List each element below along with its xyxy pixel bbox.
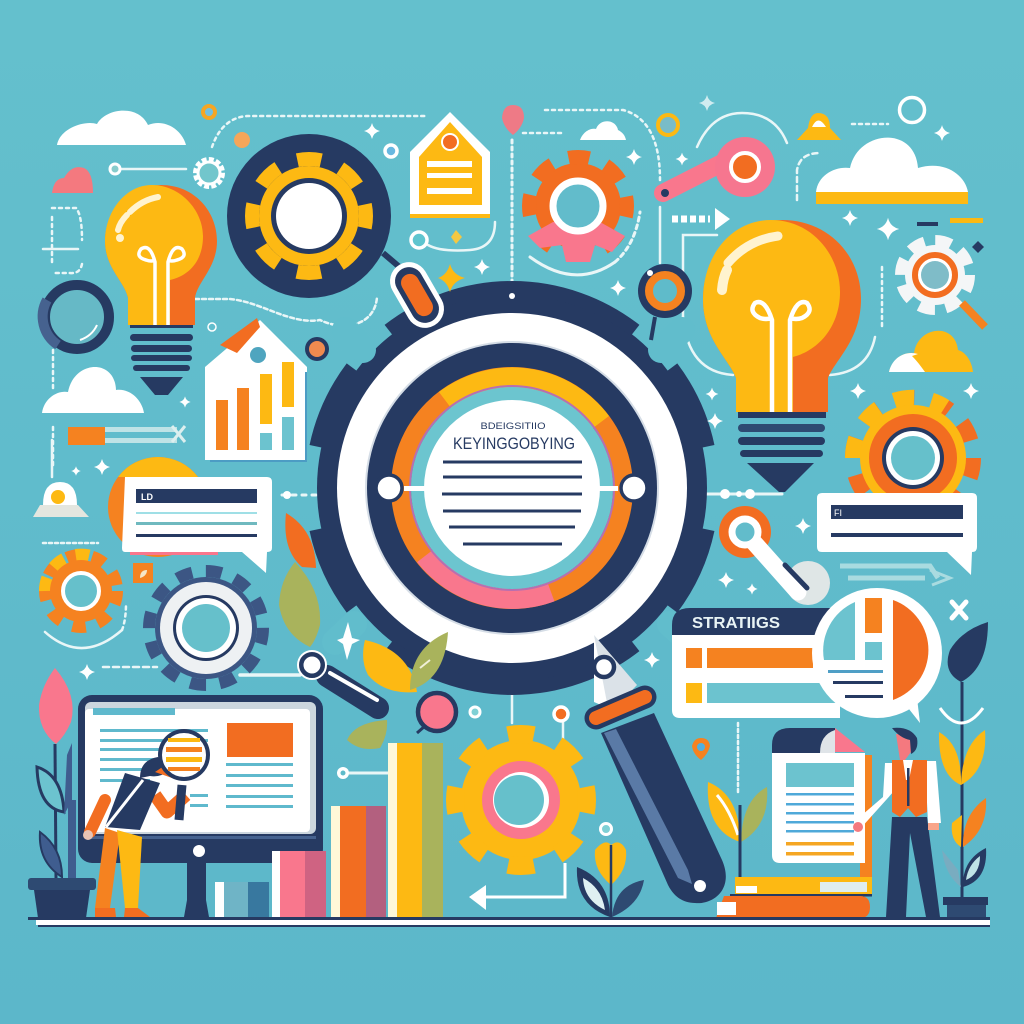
speech bubble: left: LD bbox=[141, 492, 153, 502]
small bars: top right bbox=[917, 218, 983, 226]
cloud: right yellow bbox=[889, 331, 973, 372]
chart: house with bars bbox=[205, 318, 307, 462]
gear: bottom centre yellow bbox=[455, 734, 587, 897]
cloud: top right yellow bbox=[816, 138, 968, 204]
cloud: top small bbox=[580, 121, 626, 140]
icon: small ring above plant bbox=[600, 824, 612, 834]
person: with magnifier at monitor bbox=[83, 731, 208, 917]
person: right bbox=[853, 728, 941, 917]
light bulb: right bbox=[703, 220, 861, 492]
connector node to bars bbox=[337, 767, 349, 779]
hand magnifier bbox=[160, 731, 208, 820]
icon: orange hexagon bbox=[234, 132, 250, 148]
lens heading bbox=[453, 421, 575, 453]
arrow: dashed right bbox=[672, 208, 730, 230]
icon: white ring top right bbox=[900, 98, 924, 122]
icon: navy sparkle bbox=[972, 241, 984, 253]
leaves: centre bbox=[347, 632, 448, 749]
sparkles bbox=[71, 95, 979, 680]
icon: yellow ring top right bbox=[658, 115, 678, 135]
screen heading bar bbox=[93, 708, 175, 715]
gear: top left in navy disc bbox=[227, 134, 403, 298]
ring icon: left bbox=[43, 285, 109, 349]
icon: bell dome bbox=[33, 482, 89, 517]
icon: small ring bbox=[208, 323, 216, 331]
icon: teal ring bbox=[385, 145, 397, 157]
main gear lens bbox=[316, 288, 708, 688]
gear: left small orange bbox=[45, 555, 117, 627]
icon: wrench with orange disc bbox=[719, 506, 830, 605]
cloud: top left bbox=[57, 111, 186, 145]
icon: star yellow bbox=[438, 264, 465, 292]
icon: small orange target bbox=[305, 337, 329, 361]
ground line bbox=[28, 917, 990, 927]
lens text lines bbox=[442, 462, 582, 544]
panel: strategies bbox=[672, 588, 942, 723]
books bbox=[716, 877, 872, 918]
icon: pink wrench bbox=[661, 137, 775, 197]
gear: top centre orange bbox=[528, 157, 627, 262]
speech bubble: right bbox=[817, 493, 977, 575]
lens heading: KEYINGGOBYING bbox=[453, 434, 575, 453]
gear notches bbox=[335, 330, 690, 642]
gear: navy with white ring bbox=[149, 571, 263, 685]
ring nodes bbox=[376, 475, 647, 501]
icon: small orange square bbox=[133, 563, 153, 583]
leaves: orange and olive bbox=[279, 513, 320, 647]
connector lines bbox=[43, 110, 888, 793]
light bulb: left bbox=[105, 185, 217, 395]
cloud: left middle bbox=[42, 367, 144, 413]
screen image block bbox=[227, 723, 293, 757]
plant: left bbox=[28, 668, 96, 918]
document stack bbox=[772, 728, 872, 877]
target node: top right of lens bbox=[638, 264, 692, 340]
magnifier handle: orange capsule bbox=[383, 255, 451, 335]
icon: node ring bbox=[411, 232, 427, 248]
gear: right small with magnifier bbox=[901, 241, 985, 327]
plant: small centre bbox=[577, 842, 644, 917]
gear: right large orange bbox=[853, 398, 973, 518]
gear teeth bbox=[316, 288, 708, 688]
icon: white sparkle burst bbox=[337, 622, 360, 660]
arrow: faded double bbox=[840, 566, 950, 585]
icon: small white gear bbox=[195, 159, 223, 187]
small bar: orange with tip bbox=[68, 426, 185, 445]
icon: yellow dome bbox=[797, 113, 841, 140]
icon: ring above gear bbox=[554, 707, 568, 721]
icon: pink balloon pin bbox=[417, 693, 456, 733]
icon: tag document bbox=[410, 112, 490, 218]
small magnifier: navy capsule bbox=[298, 651, 378, 708]
plant: yellow and olive leaves bbox=[708, 782, 767, 878]
plant: right bbox=[939, 622, 988, 918]
connector nodes bbox=[283, 293, 755, 499]
colour ring bbox=[401, 377, 623, 599]
icon: small ring top left bbox=[203, 106, 215, 118]
pie magnifier bbox=[812, 588, 942, 723]
monitor bbox=[78, 695, 323, 917]
lens heading: BDEIGSITIIO bbox=[480, 421, 546, 431]
screen text lines bbox=[100, 729, 293, 808]
heading: strategies: STRATIIGS bbox=[692, 615, 780, 632]
icon: node ring bbox=[110, 164, 120, 174]
speech bubble: left bbox=[108, 457, 272, 573]
speech bubble: right: FI bbox=[834, 508, 842, 518]
main magnifier: handle bbox=[594, 635, 726, 903]
icon: pin bbox=[502, 105, 524, 135]
bar chart bbox=[215, 743, 443, 918]
arrow: bottom left return bbox=[469, 885, 486, 910]
icon: small diamond bbox=[451, 230, 462, 244]
icon: white X bbox=[952, 602, 966, 618]
icon: map pin bbox=[692, 738, 710, 760]
icon: small diamond bbox=[470, 707, 480, 717]
icon: pink heart shape bbox=[52, 167, 93, 193]
